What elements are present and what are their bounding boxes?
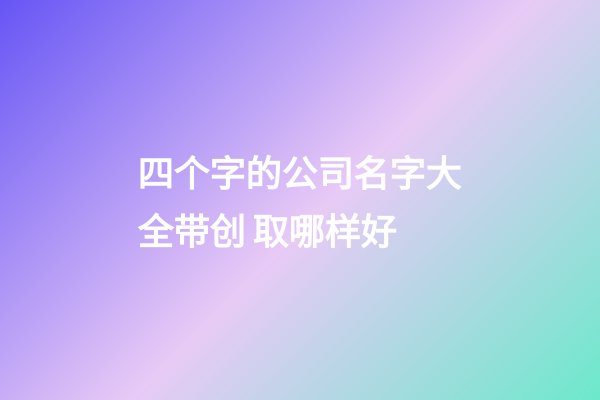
title <box>138 153 462 252</box>
title: 四个字的公司名字大 <box>138 153 462 194</box>
title: 全带创 取哪样好 <box>138 211 397 252</box>
